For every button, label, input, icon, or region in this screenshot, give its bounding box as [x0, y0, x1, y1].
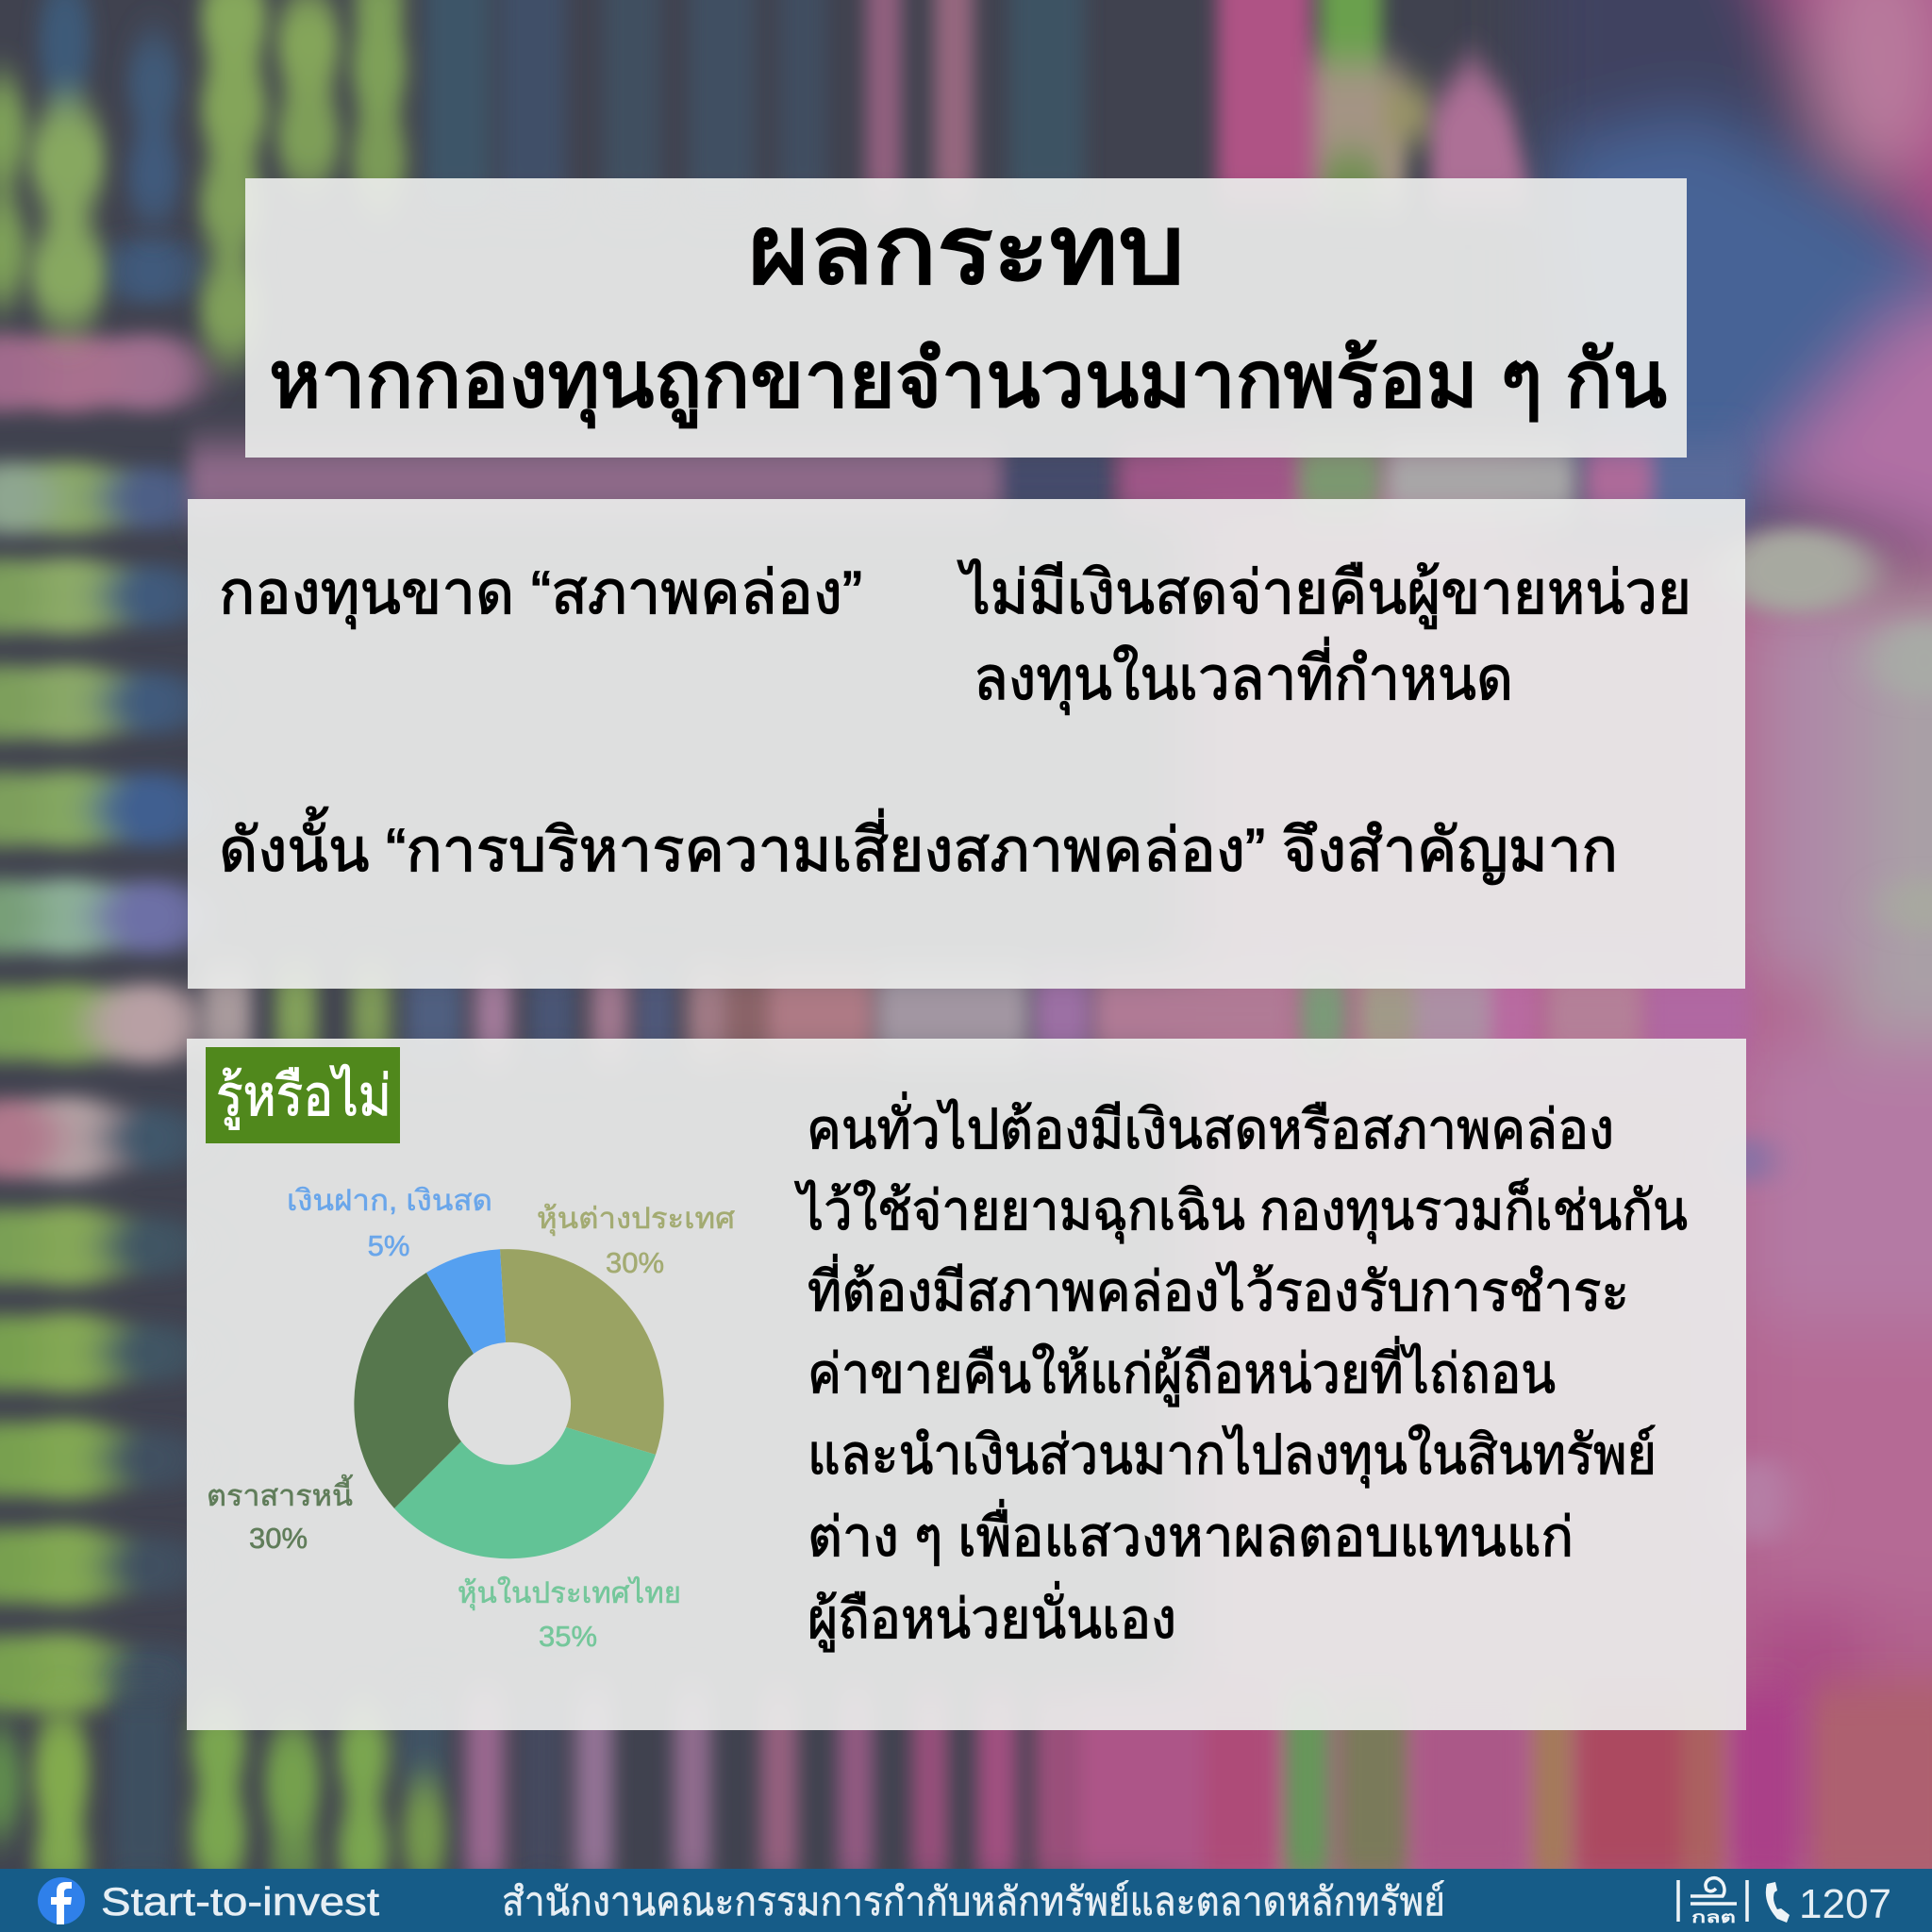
- text: explanation paragraph: ผู้ถือหน่วยนั่นเอง: [808, 1581, 1176, 1652]
- label: foreign stocks: หุ้นต่างประเทศ: [537, 1202, 735, 1237]
- label: cash: เงินฝาก, เงินสด: [287, 1184, 492, 1217]
- label: cash: [287, 1184, 492, 1262]
- donut chart: asset allocation: [354, 1249, 664, 1558]
- text: SEC organisation name: สำนักงานคณะกรรมการกำกับหลักทรัพย์และตลาดหลักทรัพย์: [502, 1879, 1445, 1924]
- footer bar: [0, 1869, 1932, 1932]
- left strip rows: [104, 237, 198, 305]
- icon: phone: [1766, 1882, 1790, 1923]
- label: Thai stocks: [458, 1576, 681, 1653]
- label: Thai stocks: หุ้นในประเทศไทย: [458, 1576, 681, 1611]
- text: explanation paragraph: ค่าขายคืนให้แก่ผู้ถือหน่วยที่ไถ่ถอน: [808, 1336, 1556, 1407]
- panel: title: [245, 178, 1687, 458]
- text: explanation paragraph: [794, 1091, 1688, 1652]
- label: bonds: 30%: [249, 1522, 308, 1555]
- slice: Thai stocks 35%: [394, 1427, 656, 1558]
- icon: SEC logo: [1678, 1878, 1747, 1926]
- icon: SEC logo: กลต: [1691, 1908, 1736, 1926]
- text: no cash to repay: ไม่มีเงินสดจ่ายคืนผู้ขายหน่วย: [957, 558, 1691, 629]
- slice: bonds 30%: [354, 1273, 474, 1508]
- text: explanation paragraph: ที่ต้องมีสภาพคล่องไว้รองรับการชำระ: [808, 1254, 1629, 1323]
- text: no cash to repay: ลงทุนในเวลาที่กำหนด: [974, 637, 1513, 715]
- label: cash: 5%: [368, 1229, 409, 1262]
- text: explanation paragraph: ต่าง ๆ เพื่อแสวงหาผลตอบแทนแก่: [808, 1499, 1574, 1568]
- text: explanation paragraph: ไว้ใช้จ่ายยามฉุกเฉิน กองทุนรวมก็เช่นกัน: [794, 1178, 1688, 1244]
- heading: subtitle: หากกองทุนถูกขายจำนวนมากพร้อม ๆ กัน: [269, 335, 1667, 429]
- lower gap strip: [203, 967, 252, 1061]
- label: foreign stocks: 30%: [606, 1246, 664, 1279]
- label: Thai stocks: 35%: [539, 1620, 597, 1653]
- label: foreign stocks: [537, 1202, 735, 1279]
- bottom band columns: [33, 1707, 90, 1840]
- heading: main title: ผลกระทบ: [748, 196, 1185, 304]
- icon: facebook: [38, 1877, 85, 1924]
- top band: [39, 0, 92, 108]
- text: liquidity risk management matters: ดังนั้น “การบริหารความเสี่ยงสภาพคล่อง” จึงสำคัญมาก: [219, 807, 1618, 884]
- slice: cash 5%: [426, 1249, 506, 1354]
- panel: did you know: [187, 1039, 1746, 1730]
- label: bonds: [207, 1474, 353, 1555]
- slice: foreign stocks 30%: [500, 1249, 664, 1455]
- panel: liquidity explanation: [188, 499, 1745, 989]
- badge: did you know: [206, 1047, 400, 1143]
- far-right highlights: [1717, 527, 1877, 614]
- text: phone number: 1207: [1799, 1881, 1891, 1927]
- badge: did you know: รู้หรือไม่: [216, 1063, 391, 1130]
- text: explanation paragraph: และนำเงินส่วนมากไปลงทุนในสินทรัพย์: [808, 1424, 1657, 1489]
- text: fund lacks liquidity: กองทุนขาด “สภาพคล่อง”: [219, 558, 862, 629]
- upper gap strip: [189, 443, 1000, 519]
- text: facebook page name: Start-to-invest: [101, 1879, 379, 1924]
- label: bonds: ตราสารหนี้: [207, 1474, 353, 1512]
- text: explanation paragraph: คนทั่วไปต้องมีเงินสดหรือสภาพคล่อง: [807, 1091, 1614, 1160]
